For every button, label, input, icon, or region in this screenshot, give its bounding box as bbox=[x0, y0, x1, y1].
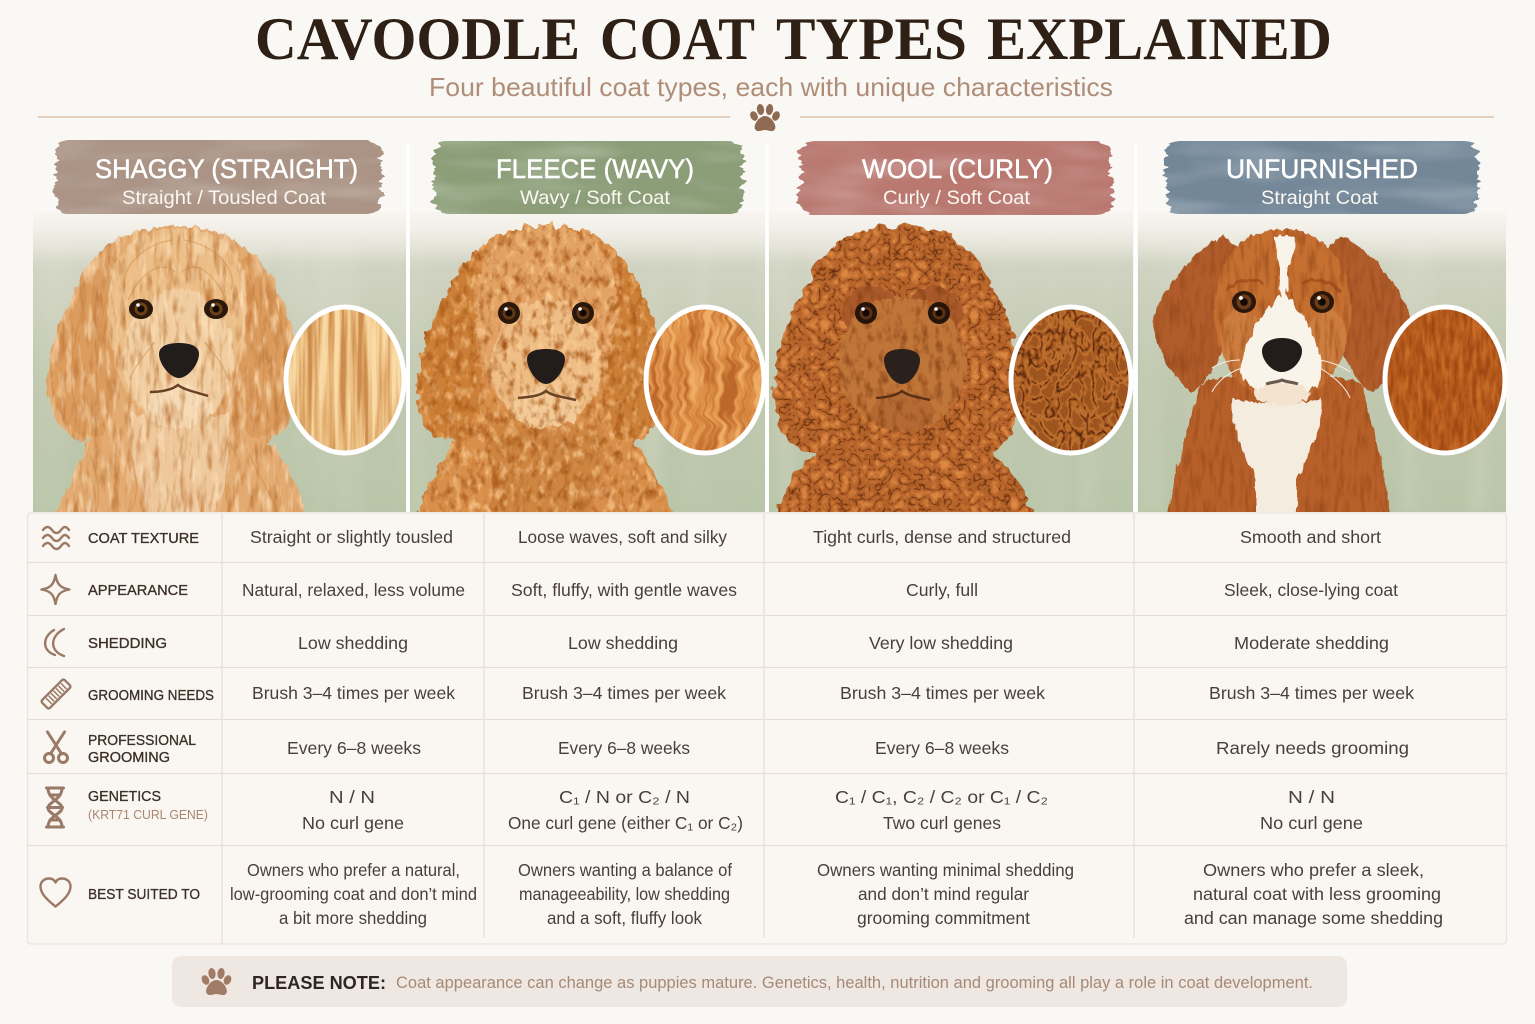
row: appearance: Sleek, close-lying coat bbox=[1224, 580, 1398, 600]
title: COAT bbox=[600, 6, 755, 72]
dog strands: shaggy bbox=[72, 240, 286, 512]
row: shedding bbox=[45, 629, 1389, 656]
row: best suited to: and don’t mind regular bbox=[858, 884, 1029, 904]
banner: shaggy: Straight / Tousled Coat bbox=[122, 187, 327, 209]
row: appearance: Curly, full bbox=[906, 580, 978, 600]
row: grooming needs: GROOMING NEEDS bbox=[88, 688, 214, 704]
row: appearance: Soft, fluffy, with gentle waves bbox=[511, 580, 737, 600]
banner: shaggy bbox=[56, 140, 382, 214]
row: best suited to: manageeability, low shedding bbox=[519, 884, 730, 904]
banner: fleece bbox=[434, 141, 743, 214]
row: genetics: N / N bbox=[329, 787, 375, 807]
row: best suited to: and a soft, fluffy look bbox=[547, 908, 702, 928]
comparison table bbox=[27, 513, 1507, 944]
coat swatch: shaggy bbox=[286, 307, 404, 453]
icon: crescents bbox=[45, 629, 64, 656]
coat swatch: unfurnished bbox=[1385, 307, 1505, 453]
row: shedding: Low shedding bbox=[568, 633, 678, 653]
dog face: wool bbox=[855, 302, 950, 400]
row: genetics: No curl gene bbox=[302, 813, 404, 833]
row: professional grooming: PROFESSIONAL bbox=[88, 733, 196, 749]
row: genetics: GENETICS bbox=[88, 789, 161, 805]
note bar: PLEASE NOTE: bbox=[252, 973, 386, 993]
title bbox=[255, 6, 1332, 72]
row: genetics: Two curl genes bbox=[883, 813, 1001, 833]
row: genetics: No curl gene bbox=[1260, 813, 1363, 833]
coat swatch: fleece bbox=[646, 307, 764, 453]
banner: unfurnished bbox=[1166, 141, 1478, 214]
row: grooming needs: Brush 3–4 times per week bbox=[522, 683, 726, 703]
row: appearance bbox=[42, 575, 1398, 604]
panel: fleece photo bbox=[410, 212, 765, 516]
note bar bbox=[172, 956, 1347, 1007]
icon: paw bbox=[749, 104, 781, 131]
icon: comb bbox=[41, 679, 71, 709]
banner: unfurnished: Straight Coat bbox=[1261, 187, 1379, 209]
divider with paw bbox=[38, 104, 1494, 131]
icon: paw bbox=[200, 968, 233, 995]
banner: shaggy: SHAGGY (STRAIGHT) bbox=[95, 154, 358, 184]
row: grooming needs: Brush 3–4 times per week bbox=[840, 683, 1045, 703]
title: EXPLAINED bbox=[987, 6, 1332, 72]
dog face: shaggy bbox=[129, 299, 228, 396]
banner: fleece: Wavy / Soft Coat bbox=[520, 187, 671, 209]
dog: fleece bbox=[416, 225, 672, 516]
dog white markings: unfurnished bbox=[1231, 235, 1323, 516]
row: professional grooming: Every 6–8 weeks bbox=[558, 738, 690, 758]
panel: unfurnished photo bbox=[1138, 212, 1506, 516]
row: coat texture: COAT TEXTURE bbox=[88, 531, 199, 547]
banner: fleece: FLEECE (WAVY) bbox=[496, 154, 694, 184]
row: professional grooming: Rarely needs grooming bbox=[1216, 738, 1409, 758]
icon: scissors bbox=[44, 732, 68, 762]
dog muzzle: wool bbox=[838, 286, 966, 432]
row: shedding: Moderate shedding bbox=[1234, 633, 1389, 653]
row: grooming needs: Brush 3–4 times per week bbox=[1209, 683, 1414, 703]
row: professional grooming bbox=[44, 732, 1409, 766]
row: professional grooming: Every 6–8 weeks bbox=[875, 738, 1009, 758]
row: genetics bbox=[46, 787, 1363, 833]
icon: heart bbox=[40, 878, 70, 906]
dog face: fleece bbox=[498, 302, 594, 400]
row: appearance: Natural, relaxed, less volume bbox=[242, 580, 465, 600]
panel separators bbox=[408, 143, 1136, 512]
row: genetics: One curl gene (either C₁ or C₂) bbox=[508, 813, 743, 833]
icon: waves bbox=[43, 527, 69, 549]
panel: shaggy photo bbox=[33, 212, 406, 516]
row: coat texture: Loose waves, soft and silky bbox=[518, 527, 727, 547]
coat swatch: wool bbox=[1011, 307, 1131, 453]
row: grooming needs: Brush 3–4 times per week bbox=[252, 683, 455, 703]
row: best suited to bbox=[40, 860, 1443, 928]
title: CAVOODLE bbox=[255, 6, 580, 72]
icon: dna bbox=[46, 788, 64, 827]
row: shedding: Very low shedding bbox=[869, 633, 1013, 653]
row: best suited to: grooming commitment bbox=[857, 908, 1030, 928]
row: best suited to: Owners who prefer a sleek, bbox=[1203, 860, 1424, 880]
banner: unfurnished: UNFURNISHED bbox=[1226, 154, 1418, 184]
row: shedding: Low shedding bbox=[298, 633, 408, 653]
row: best suited to: natural coat with less grooming bbox=[1193, 884, 1441, 904]
icon: sparkle bbox=[42, 575, 70, 604]
banner: wool: Curly / Soft Coat bbox=[883, 187, 1031, 209]
row: coat texture bbox=[43, 527, 1381, 549]
subtitle: Four beautiful coat types, each with unique characteristics bbox=[429, 72, 1113, 102]
row: best suited to: and can manage some shedding bbox=[1184, 908, 1443, 928]
row: coat texture: Smooth and short bbox=[1240, 527, 1381, 547]
dog: shaggy bbox=[47, 226, 307, 516]
row: genetics: C₁ / C₁, C₂ / C₂ or C₁ / C₂ bbox=[835, 787, 1048, 807]
row: genetics: C₁ / N or C₂ / N bbox=[559, 787, 690, 807]
row: professional grooming: GROOMING bbox=[88, 750, 170, 766]
row: best suited to: low-grooming coat and don’t mind bbox=[230, 884, 477, 904]
row: genetics: N / N bbox=[1288, 787, 1335, 807]
panel: wool photo bbox=[769, 212, 1133, 516]
row: best suited to: Owners who prefer a natural, bbox=[247, 860, 460, 880]
row: appearance: APPEARANCE bbox=[88, 583, 188, 599]
dog face: unfurnished bbox=[1212, 291, 1350, 398]
row: coat texture: Tight curls, dense and structured bbox=[813, 527, 1071, 547]
dog: wool bbox=[774, 225, 1034, 516]
row: best suited to: BEST SUITED TO bbox=[88, 887, 200, 903]
row: best suited to: Owners wanting a balance of bbox=[518, 860, 732, 880]
banner: wool: WOOL (CURLY) bbox=[862, 154, 1053, 184]
row: professional grooming: Every 6–8 weeks bbox=[287, 738, 421, 758]
row: coat texture: Straight or slightly tousled bbox=[250, 527, 453, 547]
row: shedding: SHEDDING bbox=[88, 636, 167, 652]
row: best suited to: a bit more shedding bbox=[279, 908, 427, 928]
row: best suited to: Owners wanting minimal shedding bbox=[817, 860, 1074, 880]
note bar: Coat appearance can change as puppies mature. Genetics, health, nutrition and grooming all play a role in coat development. bbox=[396, 974, 1313, 992]
dog: unfurnished bbox=[1152, 229, 1412, 516]
banner: wool bbox=[799, 141, 1112, 215]
row: genetics: (KRT71 CURL GENE) bbox=[88, 808, 208, 822]
title: TYPES bbox=[776, 6, 967, 72]
row: grooming needs bbox=[41, 679, 1414, 709]
